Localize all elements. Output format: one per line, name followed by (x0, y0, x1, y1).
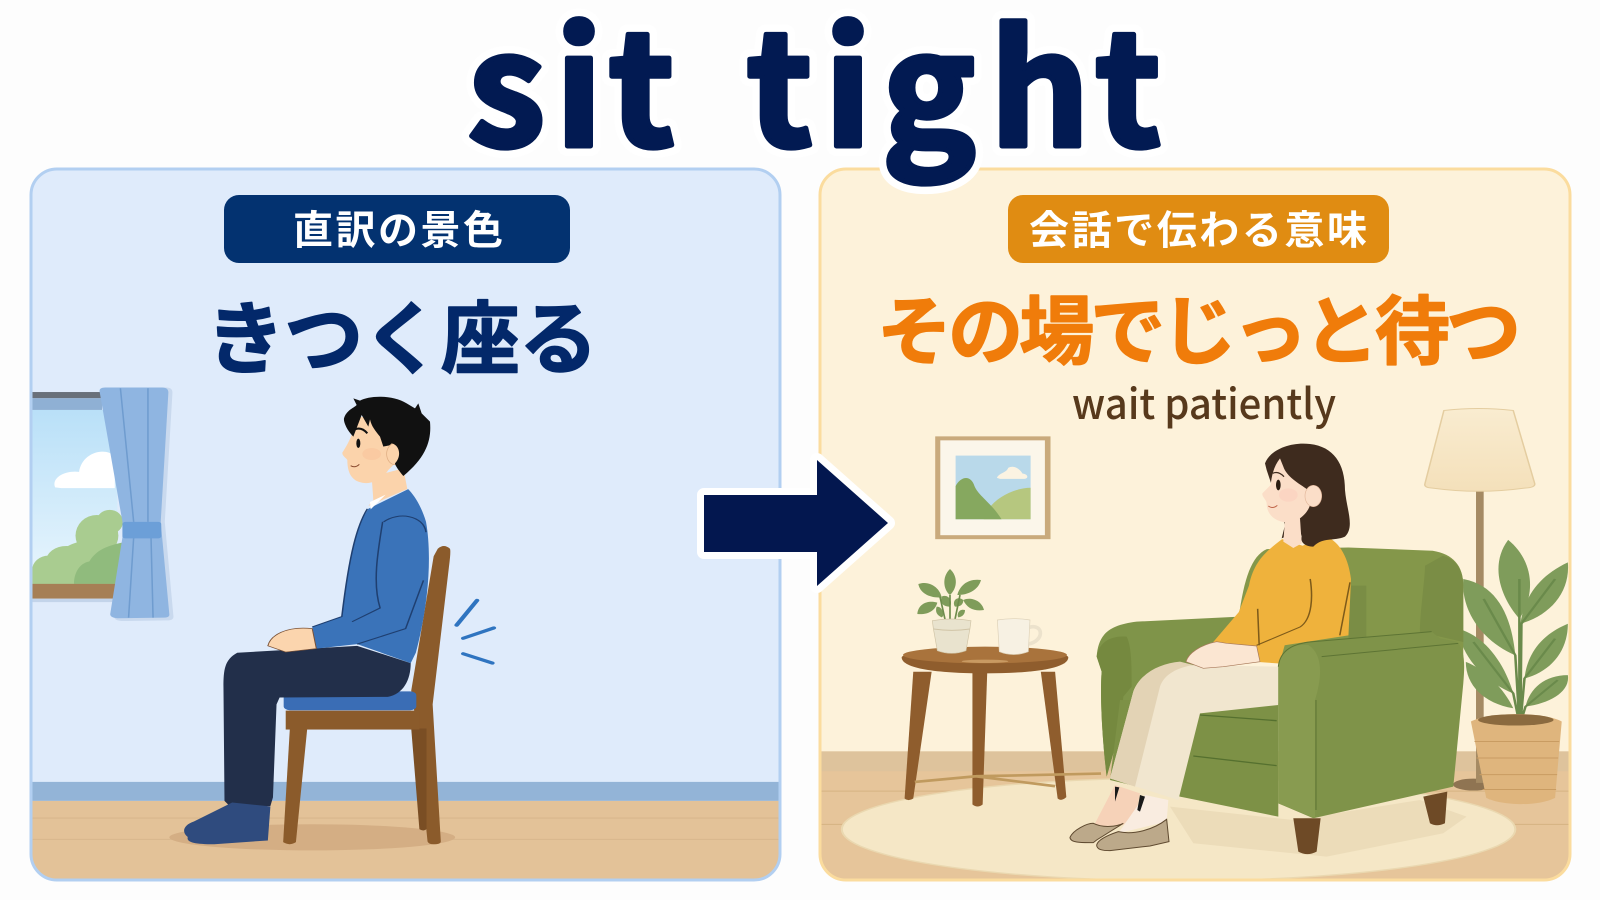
armchair far arm (1097, 617, 1240, 777)
panel background (31, 169, 780, 880)
large plant (1458, 540, 1568, 723)
trousers (223, 646, 411, 806)
illustration: woman waiting in armchair (815, 409, 1576, 884)
panel: literal scene (26, 169, 786, 883)
trousers (1110, 662, 1278, 800)
framed picture (935, 436, 1051, 539)
rug (842, 778, 1515, 881)
table top with plant and mug (902, 569, 1068, 673)
shadow under armchair (1170, 800, 1467, 857)
curtain (99, 387, 173, 621)
arm front (1278, 645, 1320, 818)
near arm (1278, 632, 1464, 818)
floor (815, 751, 1576, 884)
hands (268, 628, 316, 652)
hands and near armchair arm (1186, 632, 1464, 818)
label pill: literal: 直訳の景色 (293, 209, 503, 253)
label pill: meaning: 会話で伝わる意味 (1029, 209, 1367, 253)
english gloss: wait patiently (1072, 371, 1336, 432)
floor (26, 782, 786, 883)
shoes (1070, 819, 1169, 851)
panel: conversational meaning (815, 169, 1576, 884)
man head (342, 397, 430, 509)
label pill: literal (224, 195, 570, 263)
illustration: man sitting on chair in room (26, 387, 786, 883)
sweater (312, 489, 429, 663)
arm seams (1278, 632, 1458, 810)
chair (283, 546, 450, 844)
armchair back (1239, 547, 1463, 659)
hands (1186, 642, 1260, 668)
panel border (31, 169, 780, 880)
heading: conversational meaning: その場でじっと待つ (877, 290, 1521, 374)
ankles (1093, 785, 1168, 833)
label pill: meaning (1008, 195, 1389, 263)
mug (997, 619, 1040, 654)
floor lamp (1425, 409, 1535, 791)
plant basket (1471, 714, 1562, 804)
armchair back shading (1348, 556, 1463, 642)
sweater lines (312, 509, 426, 644)
panel background (820, 169, 1570, 880)
socks (184, 803, 270, 844)
woman sweater (1213, 536, 1351, 664)
heading: literal meaning: きつく座る (206, 295, 598, 384)
window (26, 392, 123, 602)
side table legs (905, 672, 1101, 806)
chair shadow (169, 824, 455, 850)
armchair and seated woman (1070, 617, 1467, 857)
motion lines (457, 600, 494, 663)
small potted plant (917, 569, 984, 653)
armchair base and cushion (1110, 700, 1278, 817)
woman head (1262, 444, 1350, 548)
chair legs (1293, 792, 1447, 854)
arrow (704, 460, 888, 586)
panel border (820, 169, 1570, 880)
